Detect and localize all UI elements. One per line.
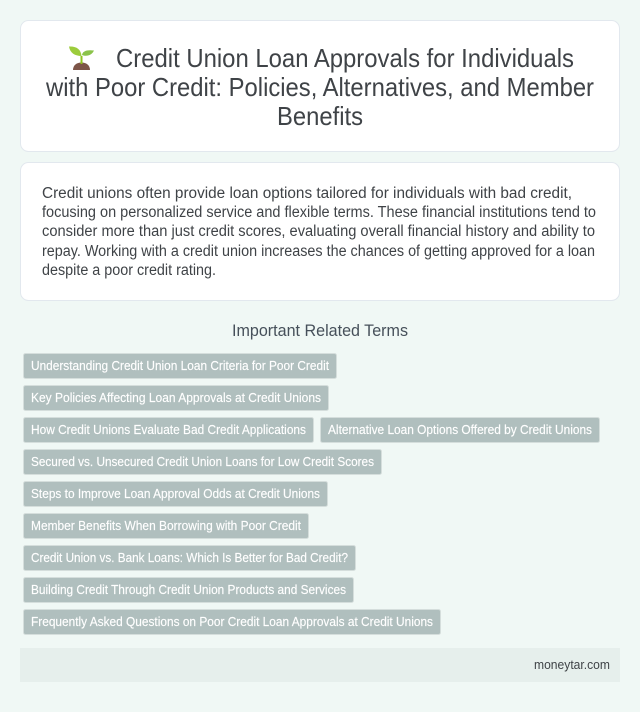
term tag 6 (24, 482, 328, 506)
title text (45, 43, 594, 131)
summary text: despite a poor credit rating. (42, 262, 216, 279)
term tag 4 (320, 418, 600, 442)
summary text: consider more than just credit scores, evaluating overall financial history and ability to (42, 223, 595, 240)
term tag 8: Credit Union vs. Bank Loans: Which Is Better for Bad Credit? (31, 551, 348, 565)
title text: Credit Union Loan Approvals for Individuals (116, 43, 574, 73)
term tag 8 (24, 546, 356, 570)
term tag 3 (24, 418, 314, 442)
term tag 2: Key Policies Affecting Loan Approvals at Credit Unions (31, 391, 321, 405)
title panel (20, 20, 620, 152)
term tag 10 (24, 610, 440, 634)
summary text: focusing on personalized service and flexible terms. These financial institutions tend to (42, 204, 596, 221)
summary text: repay. Working with a credit union increases the chances of getting approved for a loan (42, 243, 595, 260)
term tag 9 (24, 578, 354, 602)
related terms list (24, 354, 600, 634)
title text: Benefits (277, 101, 363, 131)
summary text: Credit unions often provide loan options tailored for individuals with bad credit, (42, 185, 572, 202)
panel: summary (20, 162, 620, 300)
term tag 6: Steps to Improve Loan Approval Odds at Credit Unions (31, 487, 320, 501)
footer source text: moneytar.com (534, 657, 610, 672)
term tag 5 (24, 450, 382, 474)
title text: with Poor Credit: Policies, Alternatives, and Member (45, 72, 594, 102)
term tag 1 (24, 354, 336, 378)
term tag 9: Building Credit Through Credit Union Products and Services (31, 583, 346, 597)
term tag 7 (24, 514, 308, 538)
term tag 10: Frequently Asked Questions on Poor Credit Loan Approvals at Credit Unions (31, 615, 433, 629)
summary text (42, 185, 596, 279)
term tag 3: How Credit Unions Evaluate Bad Credit Applications (31, 423, 306, 437)
term tag 5: Secured vs. Unsecured Credit Union Loans for Low Credit Scores (31, 455, 374, 469)
term tag 4: Alternative Loan Options Offered by Credit Unions (328, 423, 592, 437)
footer (20, 648, 620, 682)
term tag 1: Understanding Credit Union Loan Criteria for Poor Credit (31, 359, 329, 373)
icon: seedling (69, 46, 94, 70)
heading: related terms: Important Related Terms (232, 322, 408, 340)
term tag 7: Member Benefits When Borrowing with Poor Credit (31, 519, 301, 533)
term tag 2 (24, 386, 328, 410)
